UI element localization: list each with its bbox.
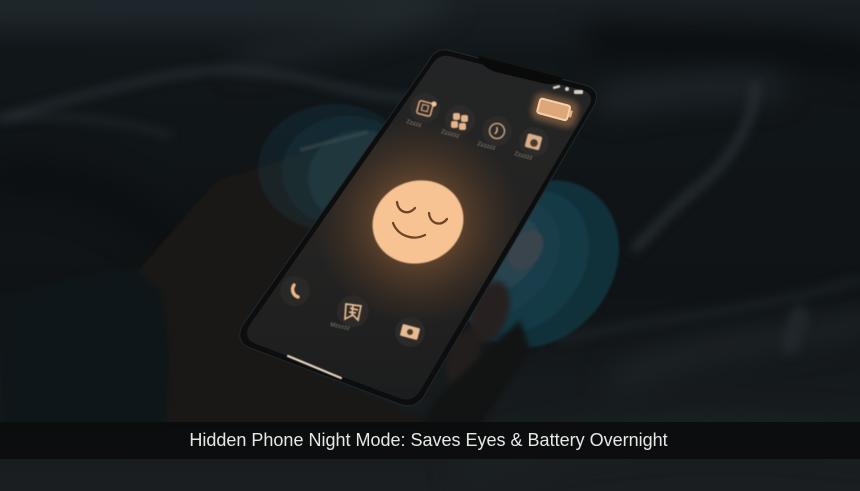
fingers on right side: [420, 276, 530, 425]
app icon: top row 1: [405, 93, 440, 129]
caption text: Hidden Phone Night Mode: Saves Eyes & Battery Overnight: [189, 430, 668, 450]
app icon: top row 3: [476, 116, 512, 152]
vibration waves: right: [422, 147, 653, 381]
smiley face: [361, 168, 475, 276]
app icon: top row 3: Zzzzzz: [476, 141, 496, 152]
app icon: top row 1: Zzzzz: [405, 119, 422, 129]
phone body: [240, 50, 597, 406]
app icon: top row 4: [513, 127, 549, 162]
status bar icons: [553, 85, 583, 94]
home indicator: [288, 356, 341, 378]
phone screen: [247, 56, 591, 399]
app icon: phone: [280, 276, 310, 306]
app icon: book: Mzzzzz: [330, 322, 350, 332]
app icon: book: [330, 295, 369, 332]
smiley glow: [328, 131, 509, 314]
notch: [478, 56, 563, 84]
vibration waves: left: [258, 104, 416, 232]
phone: [240, 50, 597, 406]
app icon: top row 2: [440, 105, 475, 140]
battery icon: [529, 91, 581, 130]
face features: [393, 202, 447, 238]
app icon: top row 2: Zzzzzz: [440, 129, 460, 140]
app icon: camera: [395, 317, 425, 347]
caption band: [0, 422, 860, 459]
app icon: top row 4: Zzzzzz: [513, 151, 533, 162]
hand holding phone: [0, 132, 440, 425]
